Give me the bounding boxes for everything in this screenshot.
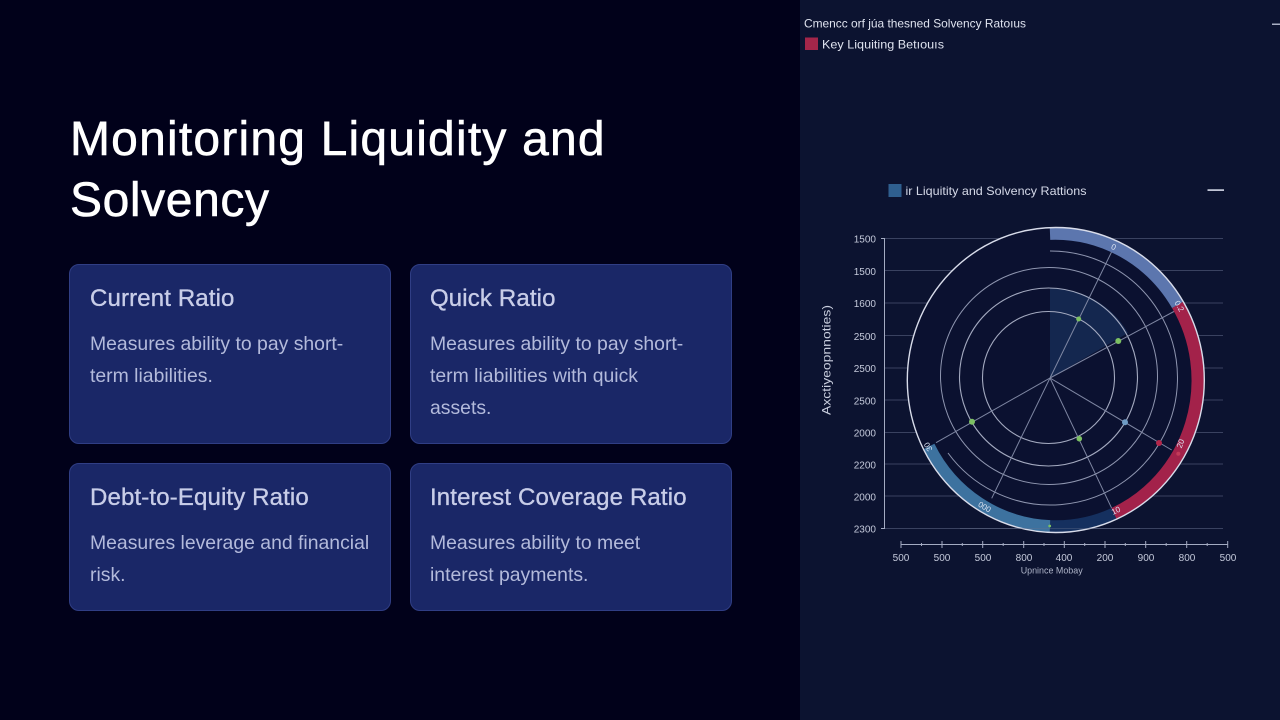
x axis tick labels: 200	[1097, 553, 1114, 564]
circle background	[907, 228, 1204, 532]
text: quick ratio description: assets.	[430, 397, 491, 419]
top dash	[1272, 24, 1280, 25]
card: current ratio	[69, 264, 391, 444]
card: interest coverage ratio	[410, 463, 732, 611]
polar chart	[885, 228, 1223, 532]
text: debt-to-equity description	[90, 532, 369, 586]
x axis tick labels: 500	[934, 553, 951, 564]
text: current ratio description	[90, 333, 343, 387]
x axis tick labels: 500	[1220, 553, 1237, 564]
text: quick ratio description	[430, 333, 683, 419]
chart legend: ir Liquitity and Solvency Rattions	[906, 184, 1086, 198]
x axis tick labels: 800	[1179, 553, 1196, 564]
title	[70, 113, 606, 227]
y axis tick labels: 2300	[854, 524, 876, 536]
heading: interest coverage ratio: Interest Coverage Ratio	[430, 484, 687, 511]
radial spokes	[936, 252, 1177, 508]
y axis tick labels: 2000	[854, 492, 876, 504]
y axis tick labels: 1500	[854, 234, 876, 246]
text: debt-to-equity description: Measures leverage and financial	[90, 532, 369, 554]
band labels: 0.2	[1172, 299, 1186, 314]
band labels	[922, 242, 1187, 517]
text: quick ratio description: Measures ability to pay short-	[430, 333, 683, 355]
top legend: key liquidity: Key Liquiting Betıouıs	[822, 38, 944, 52]
top caption: Cmencc orf júa thesned Solvency Ratoıus	[804, 16, 1026, 30]
card: debt-to-equity ratio	[69, 463, 391, 611]
band labels: 0	[1110, 242, 1118, 252]
y axis tick labels	[854, 234, 876, 536]
y axis tick labels: 2500	[854, 396, 876, 408]
outer band segments	[929, 234, 1198, 527]
y axis tick labels: 2500	[854, 332, 876, 343]
highlighted sector	[1050, 288, 1128, 378]
heading: quick ratio: Quick Ratio	[430, 285, 556, 312]
x axis tick labels	[893, 553, 1237, 564]
y axis tick labels: 2200	[854, 460, 876, 472]
outer ring outline	[907, 228, 1204, 532]
x axis title: Upnince Mobay	[1021, 566, 1083, 576]
y axis tick labels: 1600	[854, 299, 876, 310]
y axis title: Axctiyeopnnoties)	[820, 305, 834, 415]
y axis tick labels: 2000	[854, 428, 876, 440]
text: interest coverage description	[430, 532, 640, 586]
band labels: 20	[1175, 437, 1187, 449]
bottom grid line over band	[960, 528, 1140, 530]
band labels: 10	[1110, 505, 1122, 517]
title: Solvency	[70, 174, 270, 227]
text: quick ratio description: term liabilities with quick	[430, 365, 638, 387]
concentric rings	[940, 251, 1177, 505]
band labels: 000	[976, 499, 993, 514]
y axis tick labels: 1500	[854, 267, 876, 278]
text: interest coverage description: Measures ability to meet	[430, 532, 640, 554]
x axis tick labels: 900	[1138, 553, 1155, 564]
text: current ratio description: Measures ability to pay short-	[90, 333, 343, 355]
text: interest coverage description: interest payments.	[430, 564, 588, 586]
text: current ratio description: term liabilities.	[90, 365, 213, 387]
data points	[969, 316, 1180, 527]
text: debt-to-equity description: risk.	[90, 564, 126, 586]
x axis tick labels: 500	[893, 553, 910, 564]
y axis	[854, 234, 885, 536]
panel: chart background	[800, 0, 1280, 720]
x axis	[893, 541, 1237, 564]
band labels: 30	[922, 440, 934, 453]
panel: left content	[0, 0, 800, 720]
heading: debt-to-equity ratio: Debt-to-Equity Ratio	[90, 484, 309, 511]
x axis tick labels: 400	[1056, 553, 1073, 564]
card: quick ratio	[410, 264, 732, 444]
chart legend	[888, 184, 1224, 198]
heading: current ratio: Current Ratio	[90, 285, 235, 312]
y axis tick labels: 2500	[854, 364, 876, 375]
horizontal grid lines	[885, 238, 1223, 528]
title: Monitoring Liquidity and	[70, 113, 606, 166]
x axis tick labels: 800	[1016, 553, 1033, 564]
x axis tick labels: 500	[975, 553, 992, 564]
